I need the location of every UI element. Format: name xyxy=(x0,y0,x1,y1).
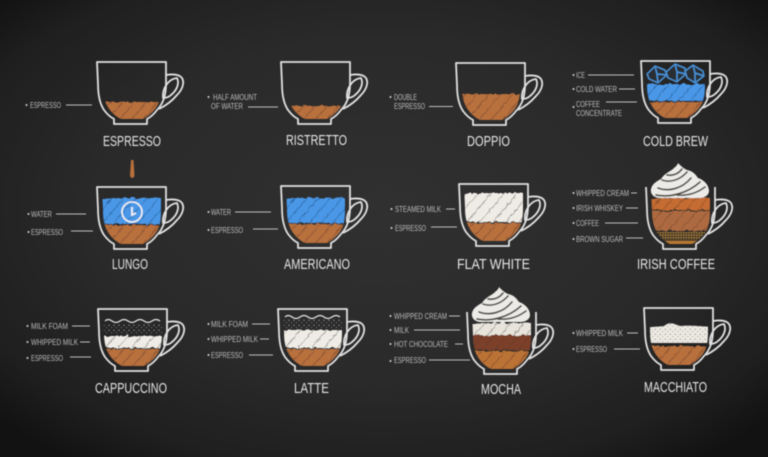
cup with mocha layers xyxy=(467,312,553,374)
cup with lungo layers xyxy=(97,187,183,249)
label: half amount of water xyxy=(208,93,278,111)
label: double espresso xyxy=(390,93,453,111)
label: espresso xyxy=(26,101,92,110)
drink: lungo xyxy=(28,160,183,273)
label: water: WATER xyxy=(31,210,52,219)
label: espresso: ESPRESSO xyxy=(211,351,243,360)
cup with ristretto fill xyxy=(281,62,367,124)
label: milk foam xyxy=(26,322,90,331)
label: brown sugar: BROWN SUGAR xyxy=(576,235,623,244)
label: espresso: ESPRESSO xyxy=(31,228,63,237)
label: half amount of water: OF WATER xyxy=(211,102,243,111)
cup with latte layers xyxy=(278,309,364,371)
label: espresso xyxy=(390,224,457,233)
title: LUNGO xyxy=(112,256,148,273)
title: LATTE xyxy=(294,380,329,397)
drink: latte xyxy=(208,309,364,397)
cup with macchiato layers xyxy=(644,308,730,370)
label: espresso xyxy=(572,345,640,354)
label: whipped milk: WHIPPED MILK xyxy=(31,338,79,347)
drink: flat white xyxy=(390,184,545,273)
label: milk foam: MILK FOAM xyxy=(211,320,248,329)
label: milk: MILK xyxy=(394,326,410,335)
label: espresso: ESPRESSO xyxy=(30,101,61,110)
label: milk xyxy=(390,326,460,335)
title: COLD BREW xyxy=(643,133,709,150)
cup with americano layers xyxy=(281,186,367,248)
label: espresso: ESPRESSO xyxy=(395,224,426,233)
label: water xyxy=(28,210,86,219)
label: double espresso: DOUBLE xyxy=(394,93,417,102)
label: espresso: ESPRESSO xyxy=(576,345,607,354)
label: half amount of water: HALF AMOUNT xyxy=(213,93,257,102)
icon: clock xyxy=(122,202,142,222)
cup with doppio fill xyxy=(456,63,542,125)
drink: cold brew xyxy=(572,61,727,150)
title: AMERICANO xyxy=(284,256,350,273)
drink: macchiato xyxy=(572,308,730,396)
label: whipped cream: WHIPPED CREAM xyxy=(394,312,447,321)
label: espresso xyxy=(208,226,278,235)
label: coffee: COFFEE xyxy=(576,219,599,228)
label: espresso: ESPRESSO xyxy=(31,354,63,363)
label: whipped milk: WHIPPED MILK xyxy=(211,335,259,344)
cup with espresso fill xyxy=(97,62,183,124)
label: irish whiskey: IRISH WHISKEY xyxy=(576,204,624,213)
drink: doppio xyxy=(390,63,542,150)
icon: ice cubes xyxy=(647,64,704,83)
title: IRISH COFFEE xyxy=(637,256,715,273)
label: hot chocolate: HOT CHOCOLATE xyxy=(394,340,448,349)
label: whipped cream: WHIPPED CREAM xyxy=(576,189,629,198)
whipped cream xyxy=(651,163,709,198)
title: RISTRETTO xyxy=(286,132,347,149)
label: whipped milk: WHIPPED MILK xyxy=(576,329,624,338)
drink: americano xyxy=(208,186,367,273)
drink: espresso xyxy=(26,62,183,150)
label: espresso xyxy=(28,228,93,237)
label: coffee concentrate: COFFEE xyxy=(576,100,600,109)
drink: mocha xyxy=(390,287,553,398)
label: steamed milk: STEAMED MILK xyxy=(395,205,442,214)
cup with cold brew layers xyxy=(641,61,727,123)
icon: coffee drop xyxy=(130,160,134,178)
drink: irish coffee xyxy=(572,163,732,273)
label: cold water: COLD WATER xyxy=(576,85,617,94)
drink: ristretto xyxy=(208,62,367,149)
label: ice xyxy=(572,71,634,80)
whipped cream xyxy=(472,287,530,322)
label: ice: ICE xyxy=(576,71,585,80)
title: DOPPIO xyxy=(467,133,510,150)
cup with cappuccino layers xyxy=(98,309,184,371)
label: espresso xyxy=(26,354,91,363)
title: CAPPUCCINO xyxy=(95,380,167,397)
title: MACCHIATO xyxy=(644,379,707,396)
title: FLAT WHITE xyxy=(457,256,530,273)
label: coffee concentrate xyxy=(572,100,637,118)
label: espresso xyxy=(390,356,470,365)
label: espresso: ESPRESSO xyxy=(211,226,243,235)
cup with irish coffee layers xyxy=(646,187,732,249)
label: milk foam: MILK FOAM xyxy=(31,322,68,331)
drink: cappuccino xyxy=(26,309,184,397)
label: coffee concentrate: CONCENTRATE xyxy=(576,109,622,118)
cup with flat white layers xyxy=(459,184,545,246)
label: water xyxy=(208,208,271,217)
label: water: WATER xyxy=(211,208,231,217)
title: ESPRESSO xyxy=(103,133,161,150)
label: double espresso: ESPRESSO xyxy=(394,102,425,111)
label: coffee xyxy=(572,219,638,228)
label: espresso: ESPRESSO xyxy=(394,356,426,365)
title: MOCHA xyxy=(481,381,521,398)
label: espresso xyxy=(208,351,273,360)
